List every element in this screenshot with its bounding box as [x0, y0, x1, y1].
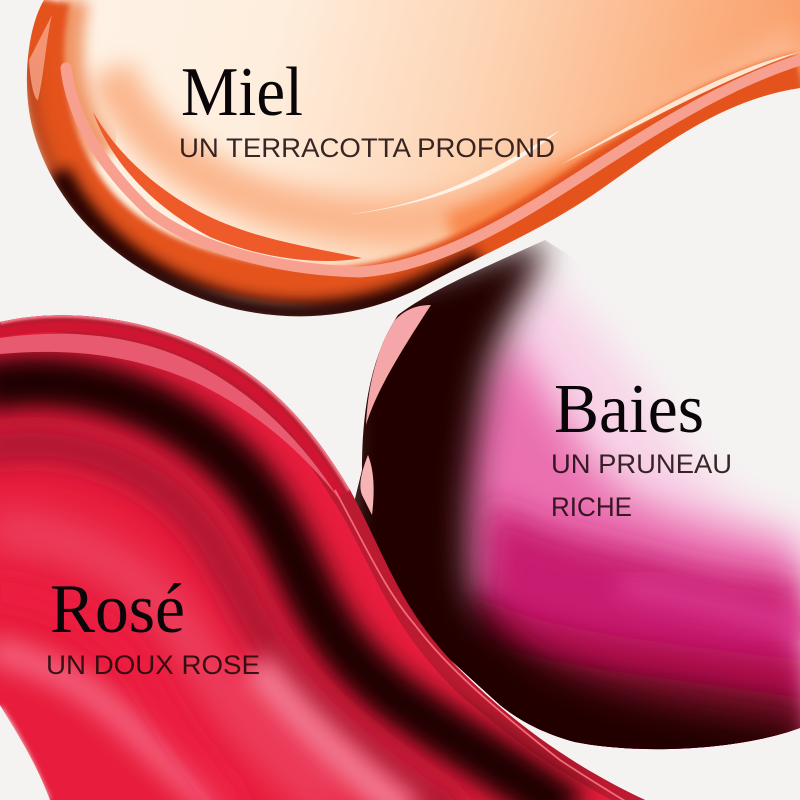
subtitle: Baies line one: UN PRUNEAU	[551, 449, 732, 479]
pink streak 2	[0, 650, 220, 800]
white gloss streak	[345, 130, 560, 215]
dark lower edge	[58, 172, 480, 313]
heading: Rosé: Rosé	[50, 571, 185, 648]
upper right gloss streak	[560, 52, 800, 165]
swatch: Rosé crimson gloss	[0, 315, 645, 800]
subtitle: Miel: UN TERRACOTTA PROFOND	[179, 133, 555, 163]
soft orange left inner shade	[69, 0, 105, 155]
subtitle: Rosé: UN DOUX ROSE	[46, 650, 260, 680]
pale pink wash	[498, 272, 800, 566]
heading: Baies: Baies	[554, 371, 704, 448]
deep red transition	[0, 444, 460, 800]
swatch: Baies plum gloss	[340, 240, 800, 780]
crimson lower band	[470, 590, 800, 760]
dark plum core	[340, 240, 800, 780]
pink gloss band	[66, 60, 800, 272]
white left-bottom corner softening	[0, 705, 50, 800]
lower pink highlight	[360, 455, 374, 515]
subtitle: Baies line two: RICHE	[551, 492, 632, 522]
peach base	[84, 0, 800, 316]
orange right stroke	[450, 70, 800, 228]
heading: Miel: Miel	[181, 54, 303, 131]
light pink lower streak	[255, 665, 410, 800]
warm peach lower band	[110, 45, 800, 222]
rim red	[0, 315, 645, 800]
pink wash	[440, 330, 800, 760]
left pale reflection	[29, 15, 52, 100]
deep orange rim	[45, 0, 800, 288]
orange streak	[93, 112, 362, 261]
bright red streak	[134, 701, 230, 800]
pink gloss strip	[0, 334, 340, 500]
pink streak 1	[0, 530, 340, 800]
dark band	[0, 382, 570, 800]
pink highlight on plum edge	[366, 305, 431, 425]
crimson lip	[0, 327, 340, 495]
swatch: Miel terracotta gloss	[0, 0, 800, 330]
fine highlight line	[335, 490, 640, 800]
brown left edge shade	[30, 60, 60, 185]
crimson magenta wash	[470, 500, 800, 760]
outer pink rim	[0, 315, 350, 490]
wine band	[473, 642, 800, 750]
crimson base	[0, 315, 645, 800]
magenta right streak	[620, 585, 800, 628]
